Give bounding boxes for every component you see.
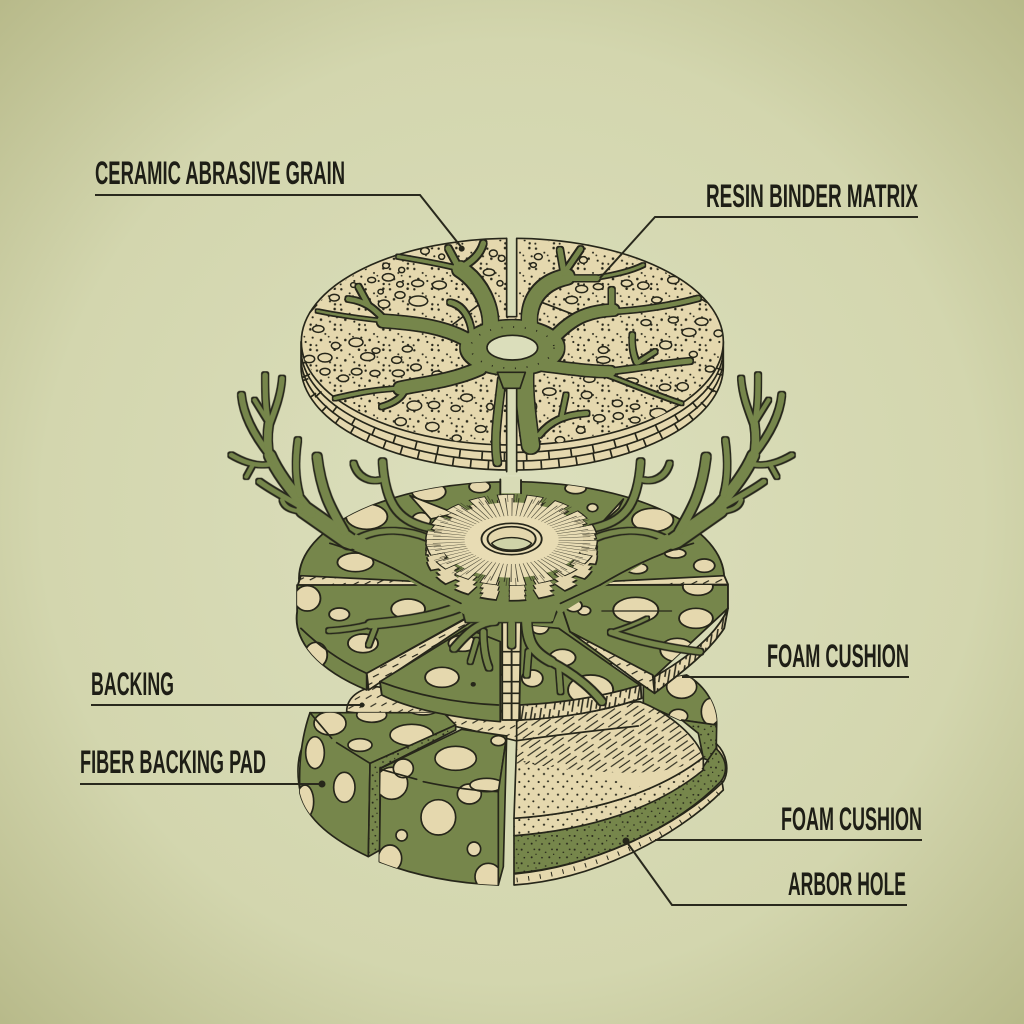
gear plain hub bbox=[465, 516, 559, 564]
green disc outer rim left bbox=[298, 743, 304, 793]
label: backing: BACKING bbox=[91, 666, 174, 702]
disc side wall bbox=[301, 342, 723, 470]
foam rim base layer bbox=[514, 743, 727, 885]
gear rays bbox=[450, 507, 574, 573]
rear centre gap bbox=[501, 477, 521, 493]
bottom disc: base layer bbox=[296, 675, 727, 890]
gear hole opening bbox=[492, 538, 532, 550]
foam cushion dots bbox=[514, 748, 726, 873]
label: fiber backing pad bbox=[80, 744, 326, 788]
hatched fiber top face bbox=[514, 702, 703, 818]
cream dotted layer bbox=[514, 757, 703, 836]
segment seams bbox=[310, 245, 707, 327]
fiber dots bbox=[517, 760, 640, 817]
label: backing bbox=[91, 666, 364, 708]
grain speckle bbox=[303, 240, 722, 444]
central gear bbox=[433, 498, 591, 597]
ceramic grain ovals bbox=[304, 248, 723, 443]
gear face bbox=[440, 502, 583, 578]
gear tooth tops outline bbox=[434, 499, 589, 581]
label: arbor hole: ARBOR HOLE bbox=[788, 866, 906, 902]
rim ticks bbox=[517, 790, 722, 880]
foam cushion green layer bbox=[514, 748, 726, 873]
dark grain marker bbox=[459, 246, 465, 252]
gap edges bbox=[500, 479, 521, 495]
label: foam cushion upper: FOAM CUSHION bbox=[767, 638, 909, 674]
side layer lines bbox=[301, 349, 723, 465]
rear segment side strips bbox=[410, 496, 623, 529]
hub micro dots bbox=[471, 327, 554, 368]
top disc: ceramic abrasive grain bbox=[301, 237, 723, 475]
lower centre slot bbox=[497, 372, 525, 475]
fiber hatch bbox=[517, 702, 703, 773]
gear side silhouette high bbox=[434, 505, 589, 587]
gear side wall upper bbox=[434, 504, 589, 586]
arbor hole in top disc bbox=[487, 335, 538, 360]
gear side wall lower fill bbox=[434, 514, 589, 596]
branch merges into disc face bbox=[330, 540, 693, 621]
rear green face bbox=[299, 482, 724, 675]
resin branches: antlers and lower roots bbox=[231, 375, 792, 702]
rear right green segment bbox=[643, 675, 720, 763]
gear side silhouette mid bbox=[434, 510, 589, 592]
label: resin binder matrix bbox=[600, 178, 918, 278]
backing speckle bbox=[347, 687, 523, 742]
gear hole inner ring bbox=[488, 527, 536, 551]
rear face spots bbox=[337, 481, 715, 574]
right cream strip bbox=[604, 576, 728, 585]
gear side wall mid bbox=[434, 509, 589, 591]
middle disc: foam cushion and resin branches bbox=[231, 375, 792, 722]
left cream strip bbox=[298, 576, 421, 586]
gear side silhouette low bbox=[434, 515, 589, 597]
label: ceramic abrasive grain bbox=[95, 155, 462, 248]
gear tooth grooves bbox=[433, 498, 591, 582]
gear tooth tops bbox=[434, 499, 589, 581]
label: fiber backing pad: FIBER BACKING PAD bbox=[80, 744, 266, 780]
fiber block left bbox=[298, 712, 456, 858]
seam line bbox=[517, 726, 638, 741]
resin binder branching network bbox=[317, 243, 698, 462]
cream layer dots bbox=[514, 757, 703, 836]
gear hole outer ring bbox=[482, 523, 542, 555]
label: arbor hole bbox=[622, 838, 907, 905]
disc top face bbox=[301, 238, 723, 445]
front-left segment bbox=[380, 628, 500, 722]
upper centre slot bbox=[507, 237, 517, 317]
centre strip bbox=[502, 622, 521, 720]
fiber block right bbox=[376, 729, 507, 890]
left lower segment bbox=[294, 585, 471, 690]
right lower segment bbox=[561, 578, 728, 693]
cream backing ring behind blocks bbox=[347, 687, 523, 742]
front-right segment bbox=[519, 617, 641, 720]
label: ceramic abrasive grain: CERAMIC ABRASIVE GRAIN bbox=[95, 155, 345, 191]
